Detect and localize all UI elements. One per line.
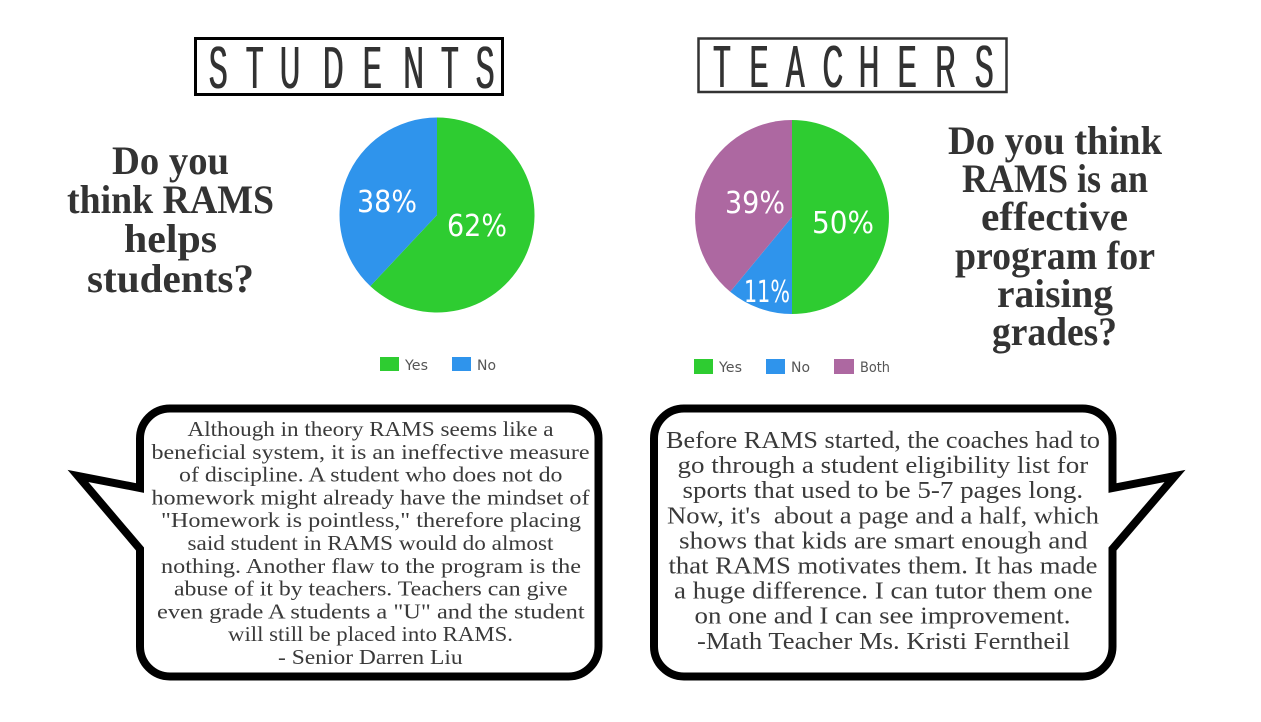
text: student quote: Although in theory RAMS seems like a: [188, 417, 554, 441]
text: student quote: - Senior Darren Liu: [278, 645, 463, 669]
text: teacher quote: a huge difference. I can tutor them one: [674, 579, 1093, 605]
text: teachers question: raising: [997, 271, 1113, 316]
text: teacher quote: Before RAMS started, the coaches had to: [666, 428, 1100, 454]
text: students question: Do you: [112, 138, 229, 183]
speech bubble: teacher quote: [654, 408, 1175, 676]
panel: students: [67, 34, 598, 677]
text: student quote: [152, 417, 590, 669]
pie chart: students: 38%: [357, 185, 417, 220]
text: students question: helps: [124, 216, 217, 261]
text: teacher quote: that RAMS motivates them. It has made: [668, 554, 1098, 580]
text: student quote: abuse of it by teachers. Teachers can give: [174, 577, 568, 601]
text: teacher quote: on one and I can see improvement.: [694, 604, 1070, 630]
text: teacher quote: [666, 428, 1100, 655]
text: teachers question: grades?: [992, 309, 1117, 354]
text: student quote: beneficial system, it is an ineffective measure: [152, 440, 590, 464]
heading: teachers: TEACHERS: [713, 33, 993, 100]
speech bubble: student quote: [78, 408, 598, 676]
text: teachers question: [948, 118, 1163, 354]
legend: teachers: Both: [860, 360, 890, 376]
panel: teachers: [654, 33, 1175, 677]
heading: students: STUDENTS: [209, 34, 494, 101]
legend: teachers: Yes: [718, 360, 742, 376]
text: student quote: of discipline. A student who does not do: [179, 463, 562, 487]
text: students question: students?: [87, 256, 254, 301]
pie chart: teachers: 39%: [725, 186, 785, 221]
text: teacher quote: go through a student eligibility list for: [678, 453, 1088, 479]
pie chart: teachers: 11%: [744, 275, 790, 310]
legend: students: Yes: [404, 358, 428, 374]
pie chart: students: 62%: [447, 209, 507, 244]
text: teacher quote: -Math Teacher Ms. Kristi Ferntheil: [697, 629, 1070, 655]
text: student quote: said student in RAMS would do almost: [188, 531, 554, 555]
text: teacher quote: shows that kids are smart enough and: [679, 528, 1088, 554]
text: student quote: even grade A students a "U" and the student: [157, 599, 585, 623]
text: students question: [67, 138, 274, 301]
text: student quote: homework might already have the mindset of: [152, 485, 590, 509]
text: student quote: "Homework is pointless," therefore placing: [161, 508, 581, 532]
legend: teachers: No: [791, 360, 810, 376]
pie chart: teachers: [695, 120, 889, 314]
text: student quote: nothing. Another flaw to the program is the: [161, 554, 581, 578]
pie chart: teachers: 50%: [812, 206, 874, 241]
text: teachers question: Do you think: [948, 118, 1163, 163]
text: students question: think RAMS: [67, 177, 274, 222]
legend: students: No: [477, 358, 496, 374]
text: student quote: will still be placed into RAMS.: [228, 622, 513, 646]
legend: teachers: [694, 359, 890, 376]
text: teacher quote: sports that used to be 5-7 pages long.: [682, 478, 1083, 504]
pie chart: students: [340, 118, 535, 312]
text: teachers question: program for: [955, 233, 1155, 278]
text: teachers question: RAMS is an: [962, 156, 1148, 201]
text: teacher quote: Now, it's about a page and a half, which: [667, 503, 1099, 529]
legend: students: [380, 357, 496, 374]
text: teachers question: effective: [981, 194, 1128, 239]
